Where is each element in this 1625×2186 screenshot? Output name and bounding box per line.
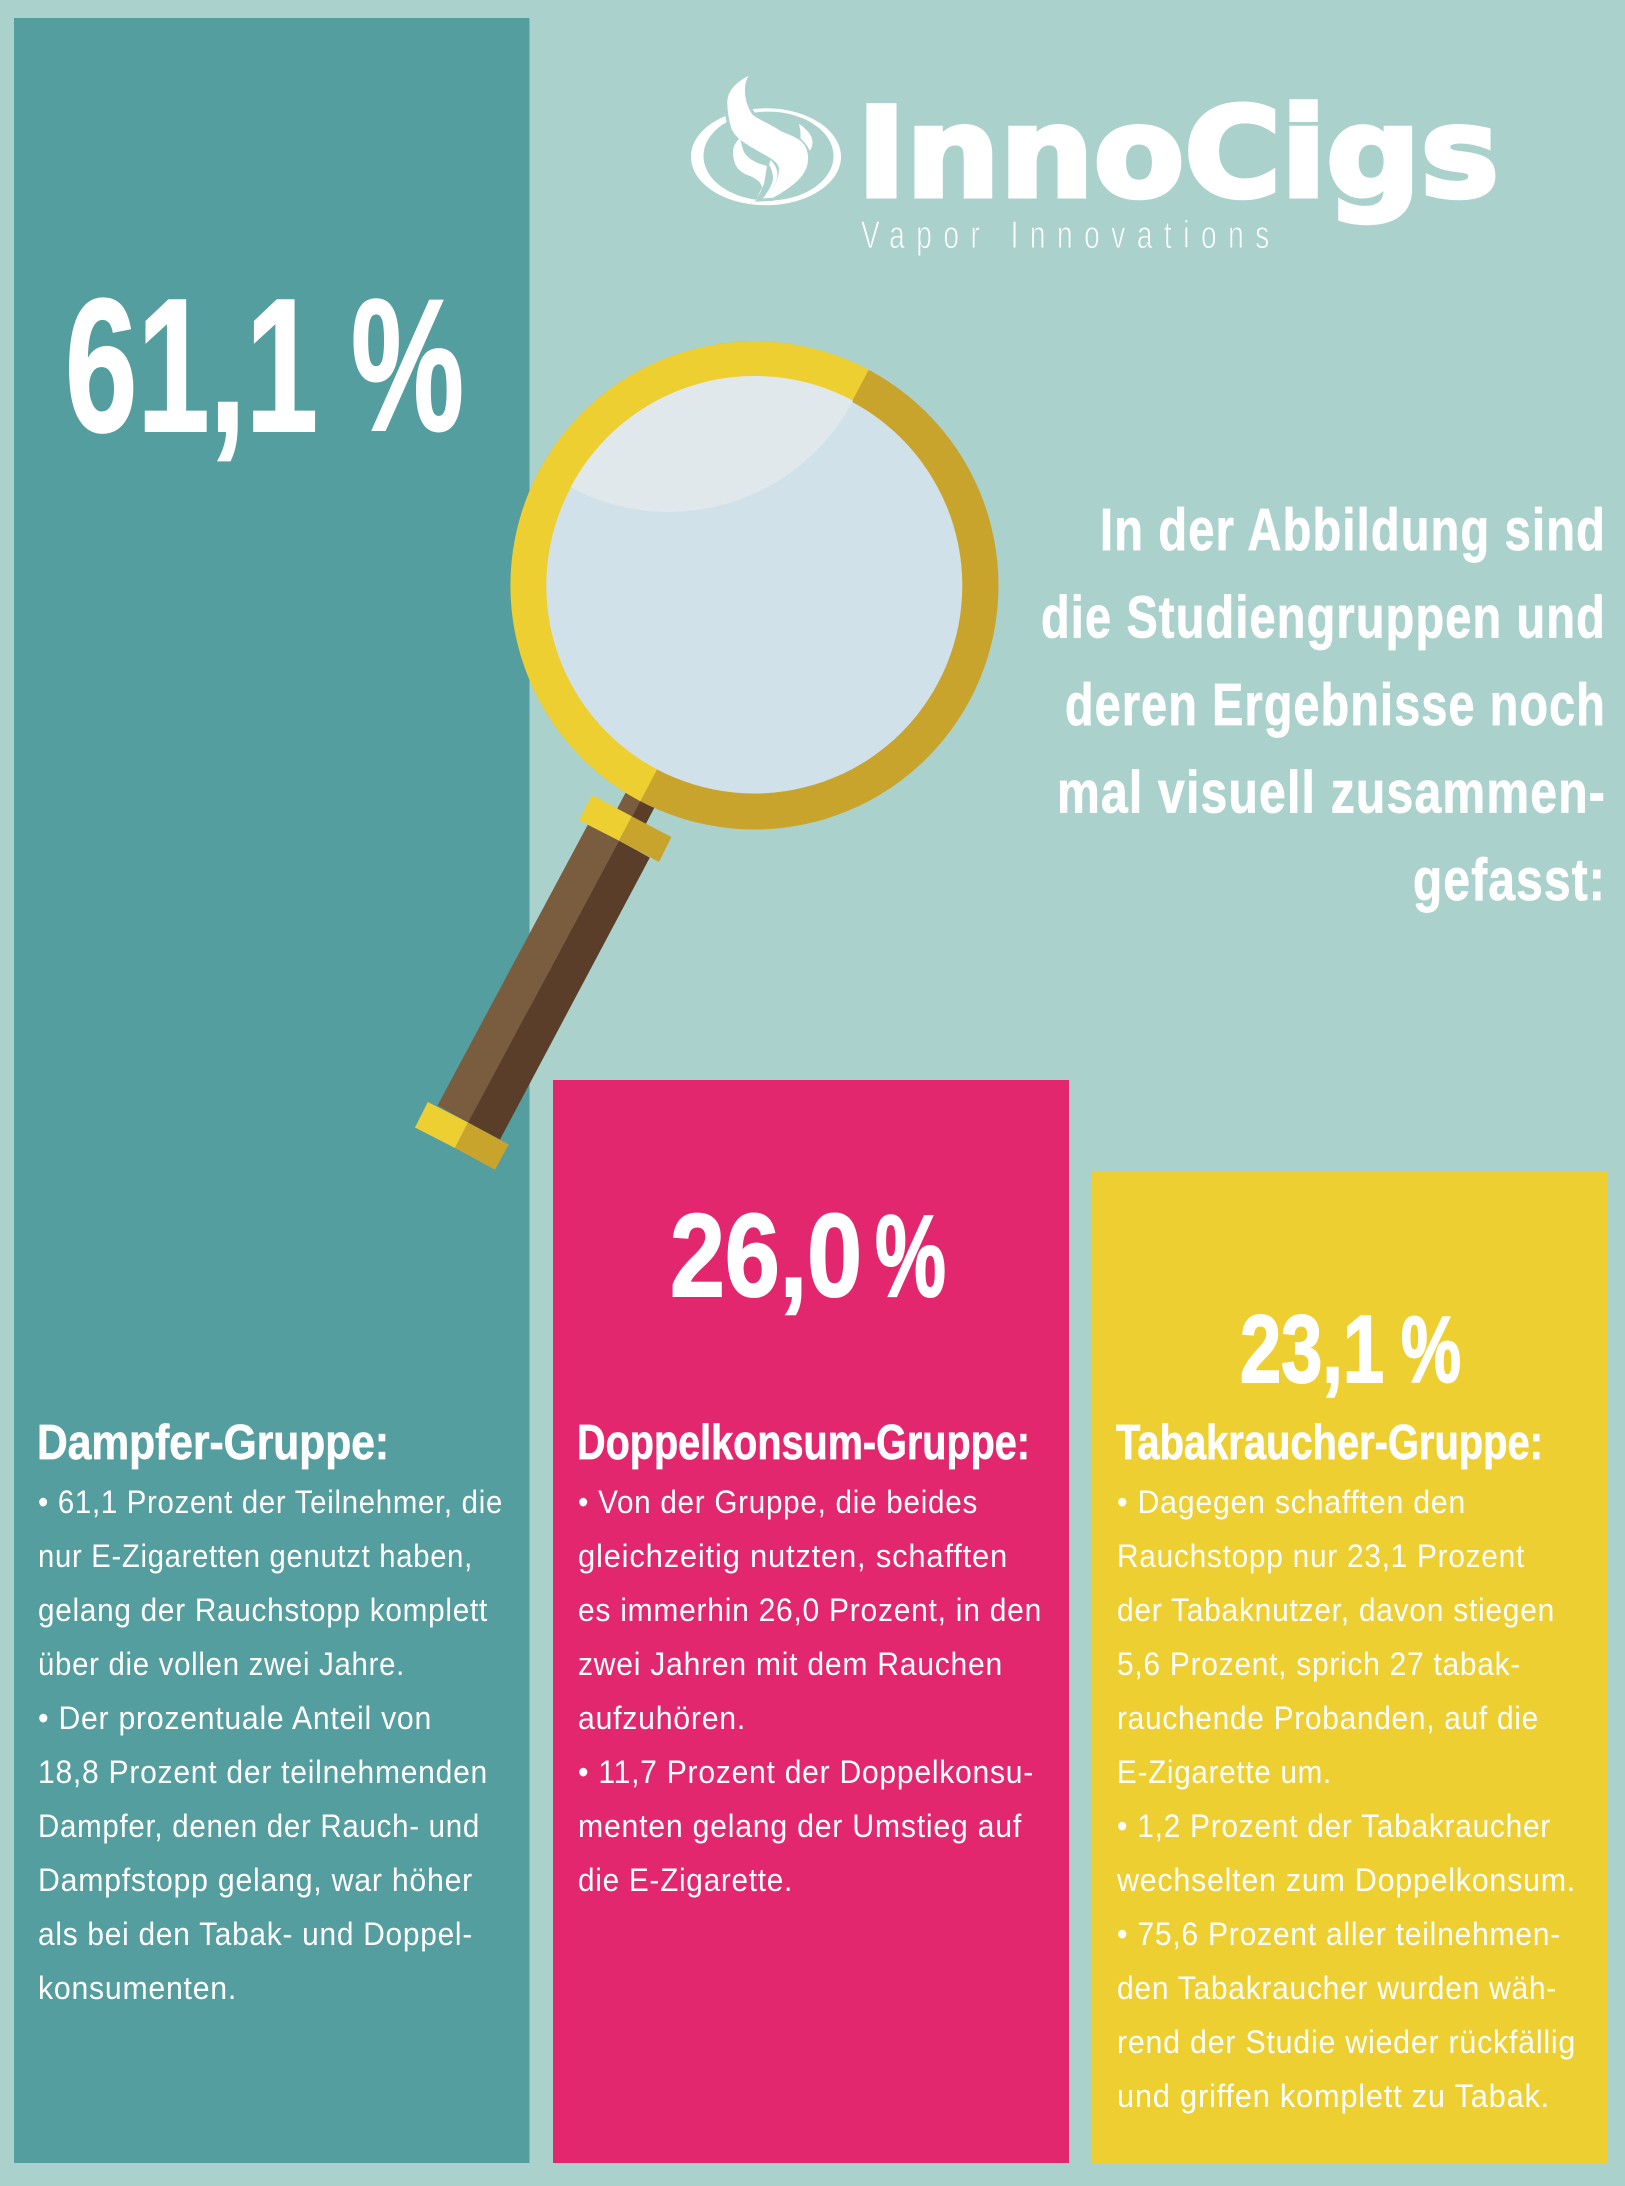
body text: Dampfer-Gruppe: • Der prozentuale Anteil von — [38, 1700, 432, 1736]
body text: Dampfer-Gruppe: 18,8 Prozent der teilnehmenden — [38, 1754, 488, 1790]
body text: Doppelkonsum-Gruppe: zwei Jahren mit dem Rauchen — [578, 1646, 1003, 1682]
body text: Tabakraucher-Gruppe: • 75,6 Prozent aller teilnehmen- — [1117, 1916, 1561, 1952]
icon: flame emblem — [691, 72, 841, 205]
big number 23,1 %: % — [1401, 1297, 1461, 1402]
lens highlight — [571, 376, 853, 512]
big number 23,1 %: 23,1 — [1240, 1296, 1384, 1403]
big number 61,1 %: 61,1 — [65, 260, 318, 472]
handle end cap — [415, 1102, 509, 1170]
body text: Dampfer-Gruppe: gelang der Rauchstopp komplett — [38, 1592, 488, 1628]
body text: Doppelkonsum-Gruppe — [578, 1484, 1042, 1898]
icon: magnifying glass — [415, 341, 998, 1170]
big number 26,0 %: 26,0 — [670, 1190, 862, 1322]
body text: Tabakraucher-Gruppe: der Tabaknutzer, davon stiegen — [1117, 1592, 1555, 1628]
body text: Tabakraucher-Gruppe: und griffen komplett zu Tabak. — [1117, 2078, 1550, 2114]
body text: Tabakraucher-Gruppe: 5,6 Prozent, sprich 27 tabak- — [1117, 1646, 1521, 1682]
panel: Dampfer-Gruppe — [14, 18, 530, 2163]
handle — [438, 825, 650, 1140]
body text: Doppelkonsum-Gruppe: • 11,7 Prozent der Doppelkonsu- — [578, 1754, 1034, 1790]
body text: Dampfer-Gruppe: nur E-Zigaretten genutzt haben, — [38, 1538, 473, 1574]
glass lens — [546, 378, 962, 794]
body text: Doppelkonsum-Gruppe: die E-Zigarette. — [578, 1862, 793, 1898]
body text: Tabakraucher-Gruppe: Rauchstopp nur 23,1 Prozent — [1117, 1538, 1525, 1574]
body text: Tabakraucher-Gruppe — [1116, 1484, 1576, 2114]
body text: Dampfer-Gruppe: Dampfstopp gelang, war höher — [38, 1862, 473, 1898]
handle neck — [608, 770, 674, 840]
wordmark: InnoCigs — [857, 82, 1499, 226]
body text: Tabakraucher-Gruppe: rauchende Probanden, auf die — [1117, 1700, 1539, 1736]
body text: Tabakraucher-Gruppe: • 1,2 Prozent der Tabakraucher — [1117, 1808, 1551, 1844]
body text: Doppelkonsum-Gruppe: menten gelang der Umstieg auf — [578, 1808, 1022, 1844]
body text: Doppelkonsum-Gruppe: aufzuhören. — [578, 1700, 746, 1736]
handle collar — [579, 795, 671, 862]
body text: Dampfer-Gruppe: Dampfer, denen der Rauch- und — [38, 1808, 480, 1844]
body text: Doppelkonsum-Gruppe: es immerhin 26,0 Prozent, in den — [578, 1592, 1042, 1628]
logo: InnoCigs — [691, 72, 1499, 257]
heading: Tabakraucher-Gruppe: Tabakraucher-Gruppe: — [1116, 1416, 1543, 1470]
tagline: Vapor Innovations — [861, 214, 1269, 257]
intro text block — [1041, 497, 1606, 913]
body text: Tabakraucher-Gruppe: wechselten zum Doppelkonsum. — [1116, 1862, 1576, 1898]
body text: Dampfer-Gruppe: konsumenten. — [38, 1970, 237, 2006]
body text: Dampfer-Gruppe: • 61,1 Prozent der Teilnehmer, die — [38, 1484, 503, 1520]
body text: Dampfer-Gruppe: über die vollen zwei Jahre. — [38, 1646, 405, 1682]
body text: Doppelkonsum-Gruppe: • Von der Gruppe, die beides — [578, 1484, 978, 1520]
body text: Dampfer-Gruppe — [38, 1484, 503, 2006]
panel: Tabakraucher-Gruppe — [1091, 1171, 1608, 2163]
body text: Doppelkonsum-Gruppe: gleichzeitig nutzten, schafften — [578, 1538, 1008, 1574]
heading: Dampfer-Gruppe: Dampfer-Gruppe: — [37, 1416, 389, 1470]
lens ring — [510, 341, 998, 830]
big number 26,0 %: % — [875, 1191, 946, 1321]
panel: Doppelkonsum-Gruppe — [553, 1080, 1069, 2163]
body text: Dampfer-Gruppe: als bei den Tabak- und Doppel- — [38, 1916, 473, 1952]
big number 61,1 %: % — [351, 260, 464, 470]
body text: Tabakraucher-Gruppe: • Dagegen schafften den — [1117, 1484, 1466, 1520]
body text: Tabakraucher-Gruppe: E-Zigarette um. — [1117, 1754, 1332, 1790]
heading: Doppelkonsum-Gruppe: Doppelkonsum-Gruppe: — [577, 1416, 1030, 1470]
body text: Tabakraucher-Gruppe: rend der Studie wieder rückfällig — [1117, 2024, 1576, 2060]
body text: Tabakraucher-Gruppe: den Tabakraucher wurden wäh- — [1117, 1970, 1557, 2006]
